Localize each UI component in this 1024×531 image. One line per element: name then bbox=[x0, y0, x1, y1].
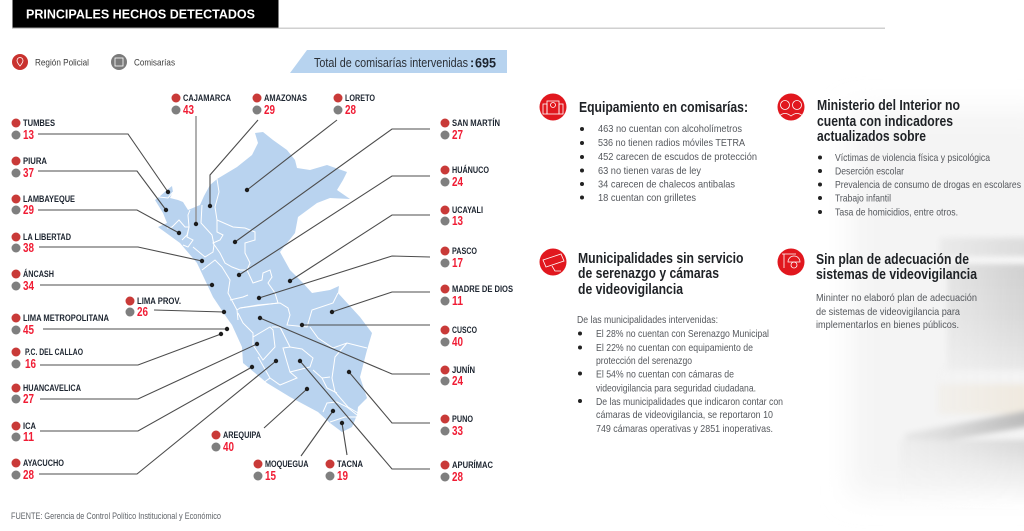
heading: Sin plan de adecuación de bbox=[816, 252, 969, 268]
label: Lima Metropolitana: LIMA METROPOLITANA bbox=[23, 313, 109, 323]
label: Ayacucho bbox=[12, 458, 64, 482]
label: Junín bbox=[440, 365, 475, 388]
title bar bbox=[12, 0, 885, 29]
label: Pasco: 17 bbox=[452, 256, 463, 270]
body text: implementarlos en bienes públicos. bbox=[816, 319, 959, 331]
total banner bbox=[290, 50, 507, 73]
label: La Libertad bbox=[12, 232, 71, 255]
leader lines bbox=[38, 116, 430, 474]
label: P.C. del Callao bbox=[12, 347, 83, 371]
label: Arequipa: AREQUIPA bbox=[223, 430, 261, 440]
bullet list: 536 no tienen radios móviles TETRA bbox=[598, 137, 745, 149]
bullet list: protección del serenazgo bbox=[596, 355, 692, 367]
total banner: : bbox=[470, 56, 474, 70]
legend: comisarías bbox=[111, 54, 175, 70]
label: P.C. del Callao: P.C. DEL CALLAO bbox=[25, 347, 83, 357]
bullet list: El 28% no cuentan con Serenazgo Municipal bbox=[596, 328, 769, 340]
label: Huancavelica bbox=[12, 383, 81, 406]
label: Tumbes bbox=[12, 118, 55, 142]
label: Pasco: PASCO bbox=[452, 246, 477, 256]
label: Piura bbox=[12, 156, 47, 180]
label: Tumbes: 13 bbox=[23, 128, 34, 142]
icon: dome camera bbox=[778, 248, 804, 276]
label: Ica bbox=[12, 421, 36, 444]
body text: de sistemas de videovigilancia para bbox=[816, 306, 960, 318]
label: Moquegua: 15 bbox=[265, 469, 276, 483]
label: Ica: ICA bbox=[23, 421, 36, 431]
legend: región policial bbox=[12, 54, 89, 70]
label: La Libertad: LA LIBERTAD bbox=[23, 232, 71, 242]
heading: Equipamiento en comisarías: bbox=[579, 100, 748, 116]
bullet list: 34 carecen de chalecos antibalas bbox=[598, 178, 735, 190]
label: Puno bbox=[440, 414, 473, 438]
label: Tacna bbox=[326, 459, 363, 483]
bullet list: El 54% no cuentan con cámaras de bbox=[596, 368, 734, 380]
label: Lima Metropolitana: 45 bbox=[23, 323, 34, 337]
panel: ministerio del interior bbox=[778, 94, 1021, 218]
label: Ucayali: UCAYALI bbox=[452, 205, 483, 215]
bullet list: 18 cuentan con grilletes bbox=[598, 192, 696, 204]
label: Lima Prov.: 26 bbox=[137, 305, 148, 319]
label: Moquegua: MOQUEGUA bbox=[265, 459, 309, 469]
heading: Ministerio del Interior no bbox=[817, 98, 960, 114]
label: Madre de Dios: 11 bbox=[452, 294, 463, 308]
label: Junín: JUNÍN bbox=[452, 365, 475, 375]
department borders bbox=[159, 179, 367, 422]
label: Loreto bbox=[334, 93, 375, 117]
label: Tacna: TACNA bbox=[337, 459, 363, 469]
label: Tumbes: TUMBES bbox=[23, 118, 55, 128]
label: Huánuco: 24 bbox=[452, 175, 463, 189]
bullet list: Trabajo infantil bbox=[835, 192, 891, 204]
heading: de serenazgo y cámaras bbox=[578, 266, 719, 282]
label: Huancavelica: 27 bbox=[23, 392, 34, 406]
bullet list: El 22% no cuentan con equipamiento de bbox=[596, 342, 753, 354]
label: San Martín: 27 bbox=[452, 128, 463, 142]
heading bbox=[817, 98, 960, 145]
bullet list: cámaras de videovigilancia, se reportaron 10 bbox=[596, 409, 773, 421]
label: Ucayali bbox=[440, 205, 483, 228]
bullet list: 749 cámaras operativas y 2851 inoperativas. bbox=[596, 423, 773, 435]
label: Junín: 24 bbox=[452, 374, 463, 388]
label: Amazonas bbox=[252, 93, 307, 117]
label: Amazonas: 29 bbox=[264, 103, 275, 117]
label: Apurímac: APURÍMAC bbox=[452, 460, 493, 470]
label: Loreto: LORETO bbox=[345, 93, 375, 103]
label: Apurímac: 28 bbox=[452, 470, 463, 484]
bullet list: Deserción escolar bbox=[835, 166, 904, 178]
bullet list: Tasa de homicidios, entre otros. bbox=[835, 206, 958, 218]
label: Huánuco: HUÁNUCO bbox=[452, 165, 489, 175]
heading: sistemas de videovigilancia bbox=[816, 267, 978, 283]
icon: security camera bbox=[540, 248, 566, 276]
body text bbox=[816, 292, 977, 331]
bullet list: 63 no tienen varas de ley bbox=[598, 165, 702, 177]
label: Ayacucho: 28 bbox=[23, 468, 34, 482]
label: Ica: 11 bbox=[23, 430, 34, 444]
bullet list: De las municipalidades que indicaron contar con bbox=[596, 396, 783, 408]
label: Moquegua bbox=[254, 459, 309, 483]
heading bbox=[816, 252, 978, 283]
label: P.C. del Callao: 16 bbox=[25, 357, 36, 371]
heading bbox=[578, 251, 744, 298]
bullet list: Víctimas de violencia física y psicológica bbox=[835, 152, 990, 164]
label: Apurímac bbox=[440, 460, 493, 484]
label: Tacna: 19 bbox=[337, 469, 348, 483]
heading: Municipalidades sin servicio bbox=[578, 251, 744, 267]
legend: región policial: Región Policial bbox=[35, 58, 89, 68]
map of Peru bbox=[155, 132, 372, 432]
label: Huancavelica: HUANCAVELICA bbox=[23, 383, 81, 393]
label: Lima Prov.: LIMA PROV. bbox=[137, 296, 181, 306]
label: Ayacucho: AYACUCHO bbox=[23, 458, 64, 468]
body text: Mininter no elaboró plan de adecuación bbox=[816, 292, 977, 304]
label: Áncash: 34 bbox=[23, 279, 34, 293]
label: Cajamarca: CAJAMARCA bbox=[183, 93, 231, 103]
label: Piura: 37 bbox=[23, 166, 34, 180]
bullet list bbox=[818, 152, 1021, 218]
source note: FUENTE: Gerencia de Control Político Institucional y Económico bbox=[11, 511, 221, 521]
label: Ucayali: 13 bbox=[452, 214, 463, 228]
heading: cuenta con indicadores bbox=[817, 114, 953, 130]
label: Lambayeque: LAMBAYEQUE bbox=[23, 194, 75, 204]
bullet list: 452 carecen de escudos de protección bbox=[598, 151, 757, 163]
label: San Martín bbox=[440, 118, 500, 142]
total banner: Total de comisarías intervenidas bbox=[314, 56, 468, 70]
label: Lima Prov. bbox=[126, 296, 181, 319]
title bar: PRINCIPALES HECHOS DETECTADOS bbox=[26, 8, 255, 22]
total banner: 695 bbox=[475, 54, 496, 70]
label: Pasco bbox=[440, 246, 477, 270]
label: Madre de Dios bbox=[440, 284, 513, 308]
label: Piura: PIURA bbox=[23, 156, 47, 166]
bullet list bbox=[578, 328, 783, 435]
legend: comisarías: Comisarías bbox=[134, 58, 175, 68]
label: La Libertad: 38 bbox=[23, 241, 34, 255]
label: Lambayeque: 29 bbox=[23, 203, 34, 217]
label: Madre de Dios: MADRE DE DIOS bbox=[452, 284, 513, 294]
label: Cusco bbox=[440, 325, 477, 349]
panel: municipalidades bbox=[540, 248, 783, 435]
label: Puno: PUNO bbox=[452, 414, 473, 424]
bullet list: 463 no cuentan con alcoholímetros bbox=[598, 123, 742, 135]
label: Cajamarca: 43 bbox=[183, 103, 194, 117]
label: Lambayeque bbox=[12, 194, 75, 217]
label: Áncash: ÁNCASH bbox=[23, 269, 54, 279]
intro text: De las municipalidades intervenidas: bbox=[577, 314, 718, 326]
panel: sin plan de adecuación bbox=[778, 248, 978, 331]
background photo fade bbox=[860, 120, 1024, 494]
panel: equipamiento en comisarías bbox=[540, 94, 757, 204]
label: Amazonas: AMAZONAS bbox=[264, 93, 307, 103]
bullet list bbox=[580, 123, 757, 204]
label: San Martín: SAN MARTÍN bbox=[452, 118, 500, 128]
heading: actualizados sobre bbox=[817, 129, 926, 145]
label: Áncash bbox=[12, 269, 54, 293]
icon: police station bbox=[540, 94, 566, 120]
label: Loreto: 28 bbox=[345, 103, 356, 117]
bullet list: videovigilancia para seguridad ciudadana. bbox=[596, 382, 756, 394]
label: Arequipa bbox=[212, 430, 261, 454]
label: Puno: 33 bbox=[452, 424, 463, 438]
label: Cusco: CUSCO bbox=[452, 325, 477, 335]
label: Arequipa: 40 bbox=[223, 440, 234, 454]
icon: children bbox=[778, 94, 804, 120]
label: Cusco: 40 bbox=[452, 335, 463, 349]
heading: de videovigilancia bbox=[578, 282, 684, 298]
label: Cajamarca bbox=[172, 93, 231, 117]
label: Lima Metropolitana bbox=[12, 313, 109, 337]
label: Huánuco bbox=[440, 165, 489, 189]
